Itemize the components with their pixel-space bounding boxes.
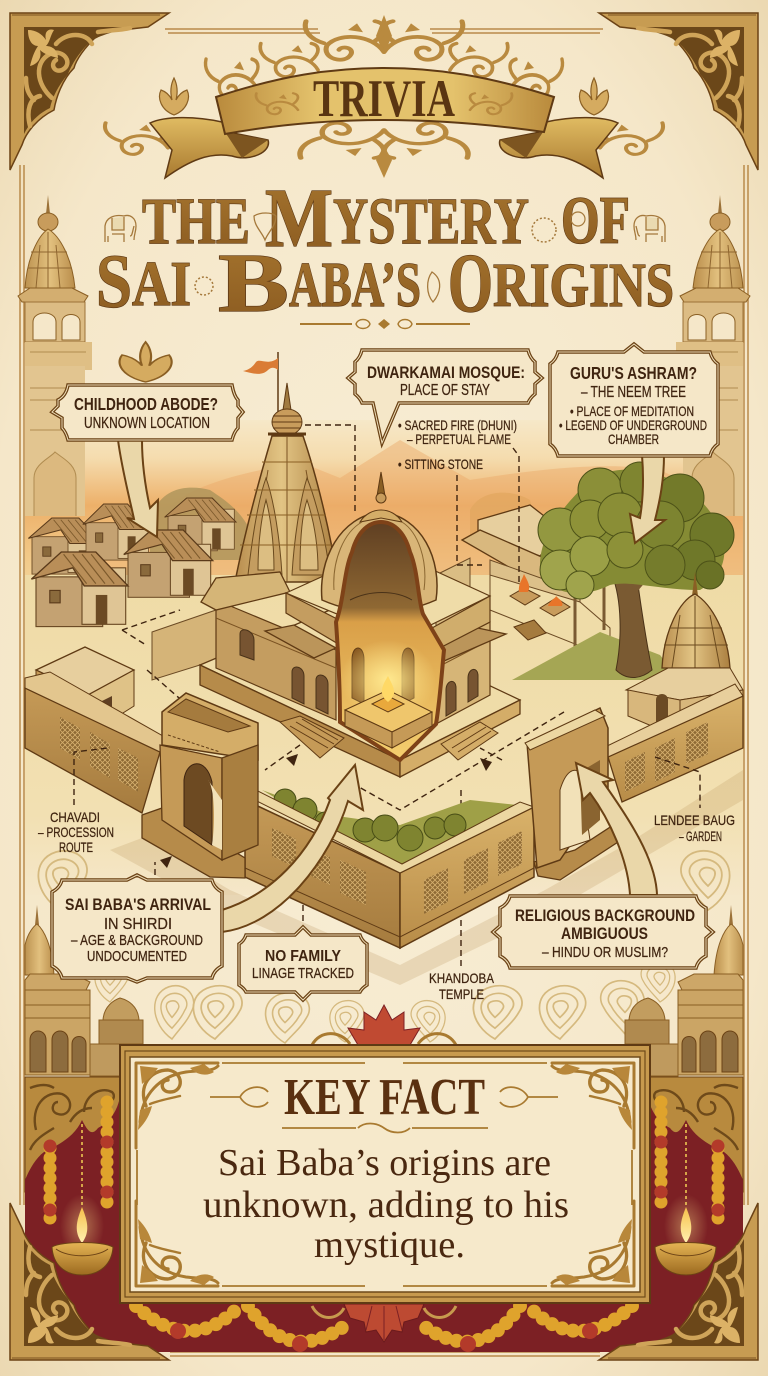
callout: Sai Baba's arrival: IN SHIRDI xyxy=(104,916,172,933)
title: ABA’S xyxy=(289,249,421,320)
callout: Dwarkamai Mosque: PLACE OF STAY xyxy=(400,382,490,399)
callout: religious background: AMBIGUOUS xyxy=(561,924,648,943)
neem tree xyxy=(538,462,734,678)
corner ornament: bottom left xyxy=(10,1203,169,1360)
callout: Sai Baba's arrival: UNDOCUMENTED xyxy=(87,949,187,965)
side tower: left xyxy=(18,195,92,516)
wall shadows on ground xyxy=(110,770,743,985)
callout: no family lineage: NO FAMILY xyxy=(265,948,341,965)
dashed arrow heads xyxy=(160,754,492,868)
callout: Sai Baba's arrival: SAI BABA'S ARRIVAL xyxy=(65,896,211,914)
label: Lendee Baug xyxy=(654,812,735,844)
upper block xyxy=(286,548,490,640)
ground xyxy=(25,575,743,895)
lower ornamental paisley band xyxy=(38,851,730,1043)
left wing xyxy=(216,600,336,720)
red base with garlands xyxy=(25,1150,743,1352)
callout: Dwarkamai Mosque: DWARKAMAI MOSQUE: xyxy=(367,363,525,382)
corner ornament: top left xyxy=(10,13,169,170)
side tower: right xyxy=(676,195,750,516)
spandrel with garland and diya: left xyxy=(25,1077,120,1275)
key fact body text: unknown, adding to his xyxy=(203,1184,569,1226)
title: S xyxy=(96,240,132,324)
title: O xyxy=(448,237,493,330)
callout: Sai Baba's arrival xyxy=(52,875,222,982)
label: Chavadi: CHAVADI xyxy=(50,809,100,825)
label: Chavadi xyxy=(38,809,114,855)
arrow: neem tree xyxy=(630,455,665,543)
village houses xyxy=(28,498,236,627)
key fact body text: mystique. xyxy=(314,1224,465,1266)
label: Khandoba Temple xyxy=(429,970,495,1002)
right wing xyxy=(436,622,490,724)
key fact body text xyxy=(203,1142,569,1266)
callout: no family lineage: LINAGE TRACKED xyxy=(252,966,354,982)
title: THE xyxy=(142,185,250,258)
callout: Guru's Ashram xyxy=(550,344,718,456)
label: Khandoba Temple: TEMPLE xyxy=(439,986,484,1002)
main temple building xyxy=(200,472,520,777)
labels: Dwarkamai bullet list: • SACRED FIRE (DHUNI) xyxy=(398,417,517,433)
lower temple: left xyxy=(25,905,143,1076)
arrow: arrival to temple xyxy=(222,765,363,932)
spandrel with garland and diya: right xyxy=(648,1077,743,1275)
title: AI xyxy=(132,248,191,319)
title: M xyxy=(265,172,333,265)
label: Chavadi: ROUTE xyxy=(59,839,93,855)
callout: Guru's Ashram: • PLACE OF MEDITATION xyxy=(570,403,694,419)
panel rules xyxy=(137,1063,632,1286)
lotus flower: top of key fact xyxy=(312,1005,456,1045)
lotus above childhood callout xyxy=(120,342,172,382)
callout: childhood abode: CHILDHOOD ABODE? xyxy=(74,394,218,414)
callout: no family lineage xyxy=(239,927,367,1000)
front garden and hedges xyxy=(262,789,517,872)
corner ornament: top right xyxy=(599,13,758,170)
callout: religious background xyxy=(493,896,713,968)
left gate xyxy=(142,693,258,878)
small house: left xyxy=(36,647,134,735)
labels: Dwarkamai bullet list: • SITTING STONE xyxy=(398,456,483,472)
key fact heading: KEY FACT xyxy=(284,1069,485,1126)
title decorations: elephants and motifs xyxy=(105,212,665,329)
compound walls: back left and back right xyxy=(25,672,743,813)
dome xyxy=(322,472,437,612)
label: Khandoba Temple: KHANDOBA xyxy=(429,970,495,986)
arches xyxy=(240,630,478,716)
panel: key fact xyxy=(120,1045,650,1303)
front wall xyxy=(245,790,534,948)
callout: Guru's Ashram: – THE NEEM TREE xyxy=(581,384,686,401)
panel corners xyxy=(136,1063,634,1286)
ashram pavilion with sacred fire xyxy=(436,505,680,680)
callout: Sai Baba's arrival: – AGE & BACKGROUND xyxy=(71,933,203,949)
callout: childhood abode: UNKNOWN LOCATION xyxy=(84,415,210,432)
label: Lendee Baug: – GARDEN xyxy=(679,828,722,844)
lower temple: right xyxy=(625,905,743,1076)
right gate xyxy=(525,708,618,880)
lotus flower: bottom of key fact xyxy=(312,1304,456,1342)
label: Chavadi: – PROCESSION xyxy=(38,824,114,840)
low courtyard wall behind temple xyxy=(152,610,216,680)
fire altars xyxy=(510,574,570,616)
callout: Guru's Ashram: CHAMBER xyxy=(608,431,659,447)
callout: religious background: – HINDU OR MUSLIM? xyxy=(542,945,668,961)
heading flourishes xyxy=(210,1087,558,1132)
callout: childhood abode xyxy=(52,385,243,440)
title: YSTERY xyxy=(333,185,529,258)
callout: Guru's Ashram: • LEGEND OF UNDERGROUND xyxy=(559,417,707,433)
arrow: childhood abode xyxy=(118,440,158,537)
labels: Dwarkamai bullet list xyxy=(398,417,517,472)
title xyxy=(96,172,674,330)
callout: religious background: RELIGIOUS BACKGROUND xyxy=(515,906,695,925)
arrow: religious background to gate xyxy=(576,763,657,895)
corner ornament: bottom right xyxy=(599,1203,758,1360)
dashed leader lines xyxy=(74,425,700,968)
banner text: TRIVIA xyxy=(313,70,455,128)
left roof tiers xyxy=(201,572,290,610)
central flame altar xyxy=(340,640,436,748)
banner: Trivia xyxy=(150,68,618,178)
title: OF xyxy=(561,182,630,258)
shikhara temple tower with flag xyxy=(235,352,338,582)
callout: Guru's Ashram: GURU'S ASHRAM? xyxy=(570,363,697,383)
label: Lendee Baug: LENDEE BAUG xyxy=(654,812,735,828)
callout: Dwarkamai Mosque xyxy=(348,350,542,443)
title: RIGINS xyxy=(493,252,674,320)
banner ornaments xyxy=(105,15,663,178)
key fact body text: Sai Baba’s origins are xyxy=(218,1142,551,1184)
title: B xyxy=(218,237,289,330)
sky and hills xyxy=(25,420,743,610)
small temple: right xyxy=(626,572,743,738)
cutaway interior xyxy=(336,522,444,760)
platform xyxy=(200,610,520,777)
labels: Dwarkamai bullet list: – PERPETUAL FLAME xyxy=(407,431,511,447)
